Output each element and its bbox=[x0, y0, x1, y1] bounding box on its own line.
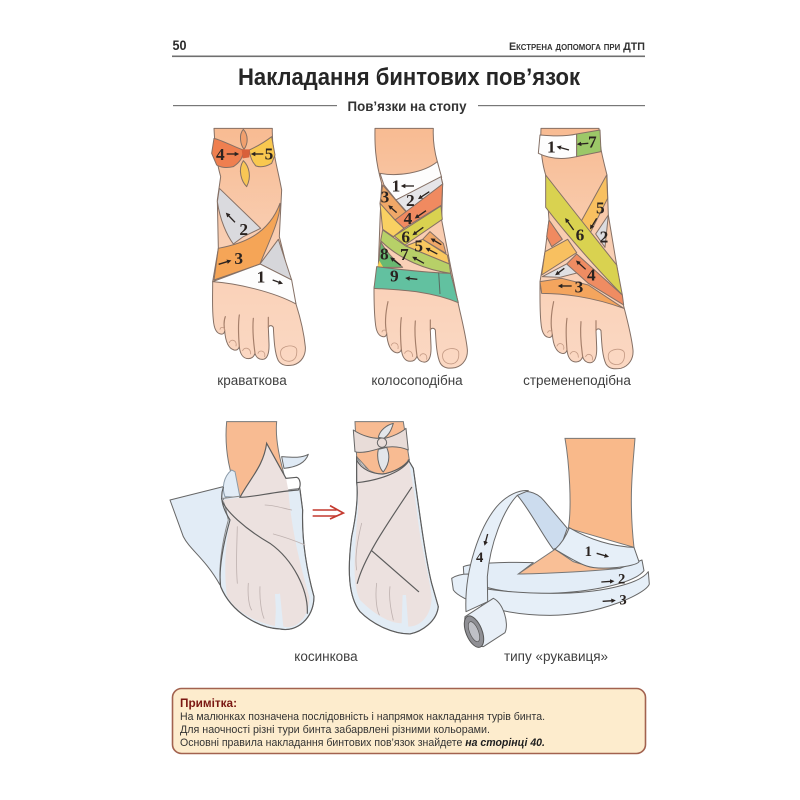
tour 2 bbox=[396, 177, 443, 212]
numbers: 1 bbox=[392, 177, 400, 196]
foot: spica bandage: 7 bbox=[400, 245, 409, 264]
toes bbox=[224, 315, 268, 353]
foot: spica bandage: 9 bbox=[390, 267, 399, 286]
ankle tails bbox=[240, 129, 247, 149]
foot bbox=[518, 549, 620, 574]
foot: stirrup bandage bbox=[538, 128, 633, 369]
label: kerchief: косинкова bbox=[294, 649, 358, 664]
foot: spica bandage: 3 bbox=[381, 188, 390, 207]
note box bbox=[172, 688, 646, 754]
kerchief bandage illustrations bbox=[170, 422, 438, 634]
tour 2 bbox=[596, 215, 608, 247]
foot wrap bbox=[355, 460, 432, 627]
tour 3 bbox=[380, 185, 407, 220]
tour 3 bbox=[214, 203, 280, 280]
foot: cravat bandage: 1 bbox=[257, 268, 265, 287]
label: spica: колосоподібна bbox=[371, 373, 463, 388]
note text bbox=[180, 711, 545, 749]
yellow strip bbox=[380, 203, 404, 237]
mitten bandage illustration bbox=[452, 438, 649, 650]
label: cravat: краваткова bbox=[217, 373, 287, 388]
foot: cravat bandage: 5 bbox=[265, 144, 274, 163]
tours 4 and 5 bbox=[212, 138, 243, 167]
foot: stirrup bandage: 4 bbox=[587, 266, 596, 285]
tour 3 bbox=[540, 278, 624, 308]
arrows bbox=[227, 152, 236, 156]
yellow strip bbox=[542, 239, 577, 275]
foot: spica bandage: 4 bbox=[404, 209, 413, 228]
label: mitten: типу «рукавиця» bbox=[504, 649, 608, 664]
foot wrap bbox=[223, 443, 309, 627]
section heading: Пов’язки на стопу bbox=[348, 98, 467, 114]
right foot bbox=[349, 422, 438, 634]
page number: 50 bbox=[172, 37, 187, 53]
bandage roll bbox=[460, 598, 506, 650]
numbers: 1 bbox=[585, 544, 592, 560]
foot: stirrup bandage: 6 bbox=[576, 226, 585, 245]
cuff bbox=[223, 470, 240, 497]
foot: spica bandage: 8 bbox=[380, 244, 389, 263]
leg bbox=[565, 438, 635, 547]
tour 6 bbox=[394, 206, 442, 245]
tour 1 bbox=[260, 239, 292, 280]
grey strip bbox=[542, 263, 578, 277]
mitten bandage illustration: 3 bbox=[619, 593, 627, 609]
tour 1 bbox=[380, 162, 442, 200]
foot: cravat bandage: 3 bbox=[234, 249, 243, 268]
foot: stirrup bandage: 2 bbox=[600, 227, 608, 246]
loop inner side bbox=[517, 492, 567, 549]
foot: spica bandage bbox=[374, 128, 467, 368]
foot edge bbox=[349, 457, 438, 634]
toes bbox=[386, 302, 430, 356]
numbers: 4 bbox=[216, 145, 225, 164]
tour 5 bbox=[423, 232, 446, 253]
note text: На малюнках позначена послідовність і напрямок накладання турів бинта. bbox=[180, 711, 545, 723]
tour 9 bbox=[374, 267, 458, 303]
foot: cravat bandage: 2 bbox=[239, 220, 248, 239]
tour 6 bbox=[546, 175, 622, 295]
note text: Основні правила накладання бинтових пов’язок знайдете на сторінці 40. bbox=[180, 737, 545, 749]
knot tails bbox=[378, 423, 393, 438]
foot: stirrup bandage: 3 bbox=[575, 278, 584, 297]
arrow: double red bbox=[313, 506, 343, 519]
label: stirrup: стременеподібна bbox=[523, 373, 631, 388]
red strip bbox=[547, 220, 562, 247]
foot: stirrup bandage: 5 bbox=[596, 198, 605, 217]
foot: cravat bandage bbox=[212, 128, 305, 365]
arrows bbox=[560, 147, 569, 150]
mitten bandage illustration: 2 bbox=[618, 571, 625, 587]
band 1 bbox=[555, 528, 639, 568]
tour 7 bbox=[577, 130, 601, 157]
back tail bbox=[282, 454, 308, 468]
side flap bbox=[170, 487, 232, 585]
foot: spica bandage: 2 bbox=[406, 191, 415, 210]
knot band bbox=[353, 428, 408, 452]
foot: stirrup bandage: 7 bbox=[588, 132, 597, 151]
foot outline bbox=[374, 128, 467, 368]
tour 1 bbox=[538, 134, 577, 158]
band 2 bbox=[463, 560, 644, 593]
arrows bbox=[597, 553, 606, 556]
foot outline bbox=[212, 128, 305, 365]
numbers: 1 bbox=[547, 137, 556, 156]
foot outline bbox=[540, 128, 633, 369]
note text: Для наочності різні тури бинта забарвлені різними кольорами. bbox=[180, 724, 490, 736]
tour 2 bbox=[217, 188, 261, 244]
sole edge bbox=[220, 488, 314, 630]
tour 7 bbox=[381, 230, 451, 273]
band 3 bbox=[452, 572, 649, 615]
tour 4 bbox=[395, 184, 443, 228]
arrows bbox=[404, 184, 414, 188]
foot: spica bandage: 6 bbox=[401, 227, 410, 246]
tour 5 bbox=[581, 175, 608, 233]
knot bbox=[377, 438, 387, 447]
tour 8 bbox=[378, 242, 403, 267]
left foot bbox=[170, 422, 314, 630]
note heading: Примітка: bbox=[180, 696, 237, 710]
foot: spica bandage: 5 bbox=[414, 237, 423, 256]
running header: Екстрена допомога при ДТП bbox=[509, 41, 645, 53]
tour 4 bbox=[567, 254, 624, 305]
title: Накладання бинтових пов’язок bbox=[238, 64, 581, 91]
band 4 bbox=[466, 490, 528, 612]
toes bbox=[551, 302, 596, 357]
leg bbox=[226, 422, 286, 498]
leg bbox=[355, 422, 409, 475]
mitten bandage illustration: 4 bbox=[476, 550, 484, 566]
